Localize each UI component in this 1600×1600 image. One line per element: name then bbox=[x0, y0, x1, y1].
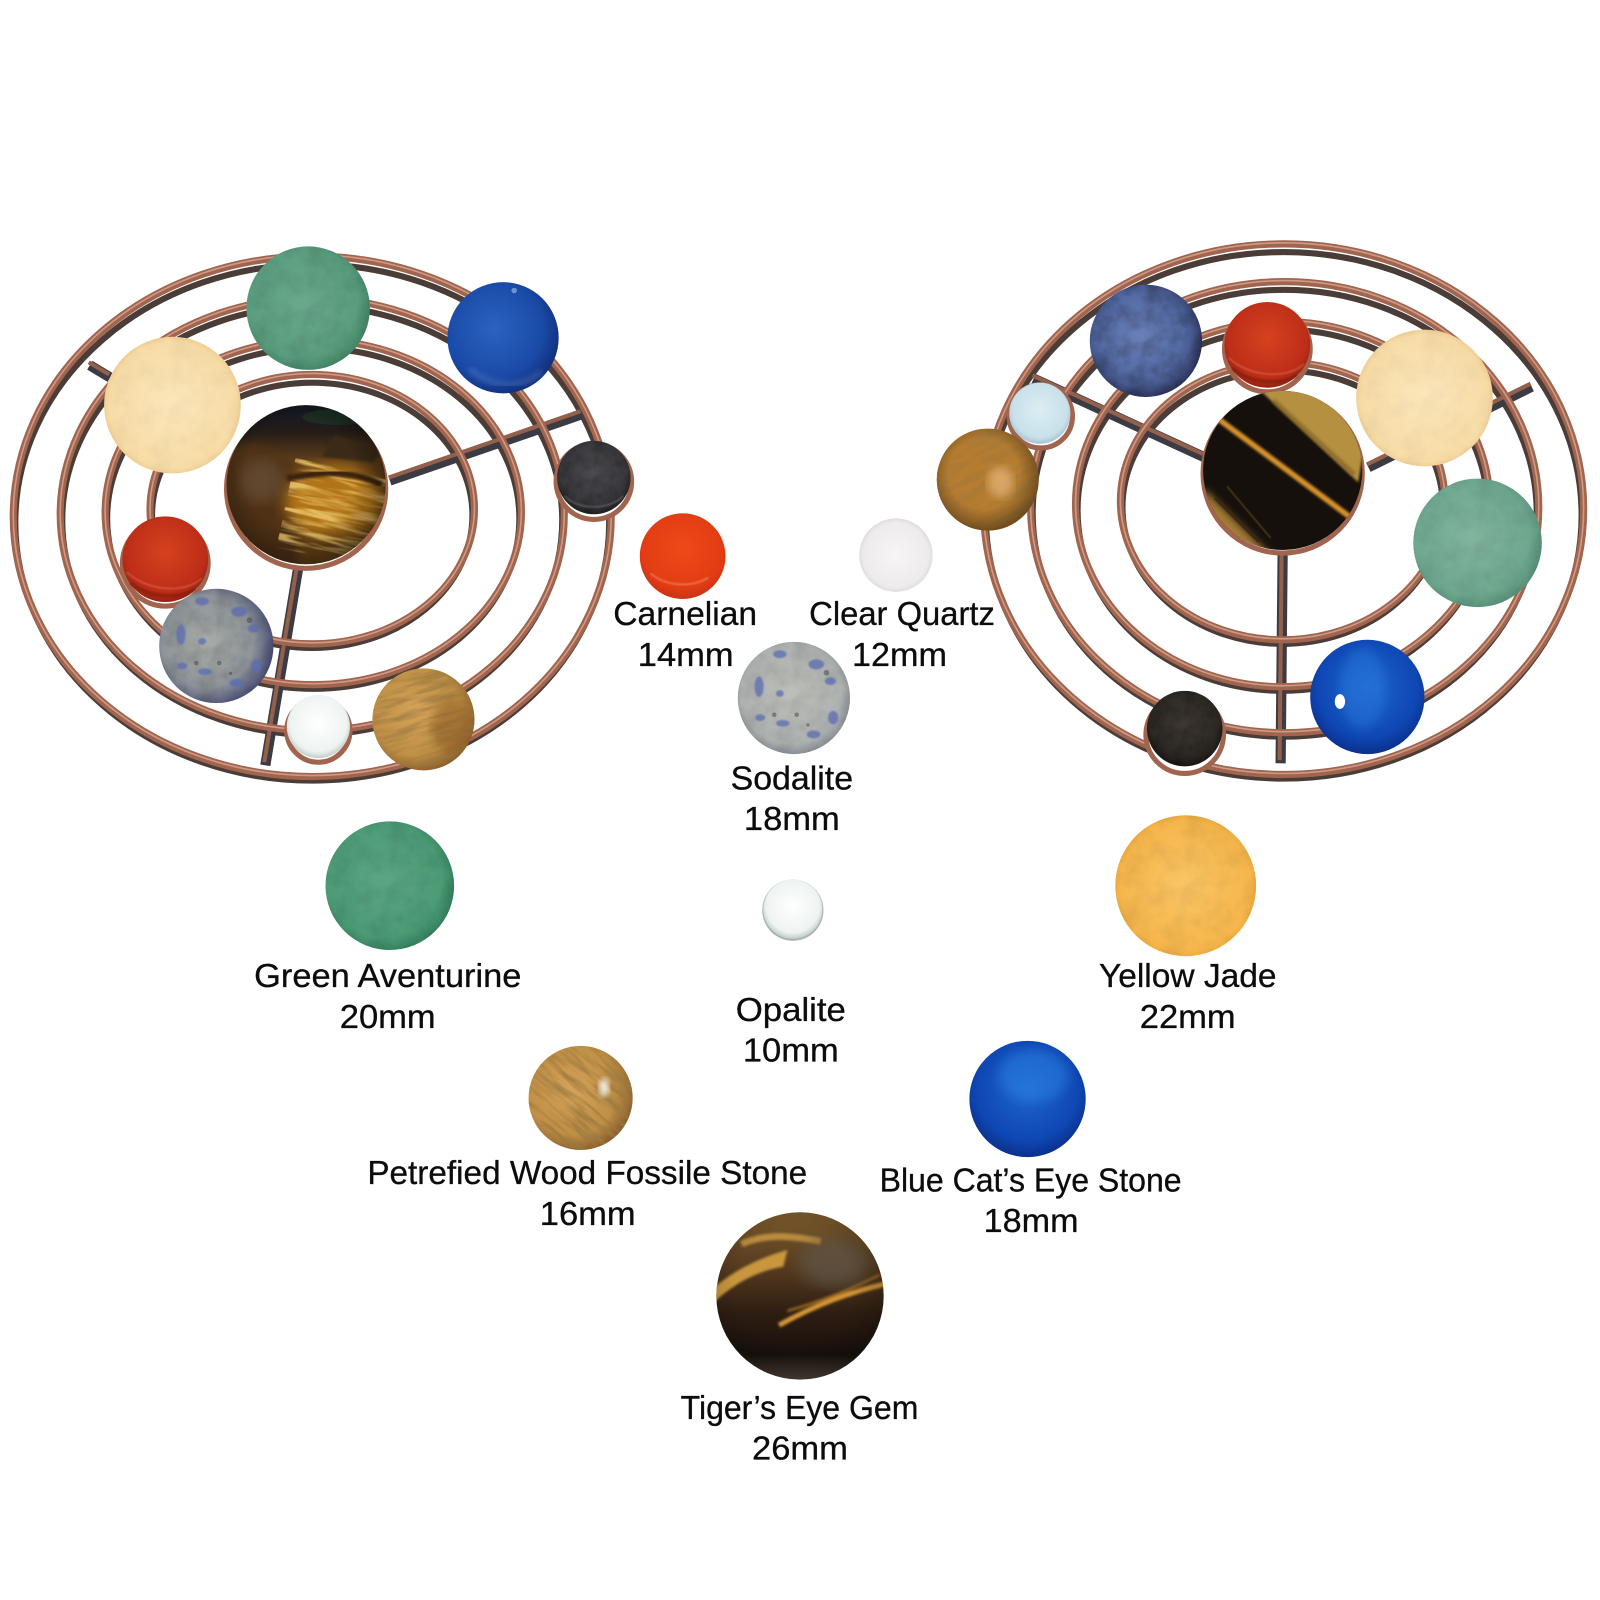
icon: blue cat's eye sphere bbox=[969, 1041, 1086, 1157]
stone: opalite bbox=[287, 695, 350, 758]
stone: petrified wood bbox=[342, 638, 505, 801]
label: green aventurine: Green Aventurine bbox=[254, 958, 521, 995]
stone: yellow jade with label bbox=[1099, 815, 1277, 1036]
icon: opalite sphere bbox=[762, 880, 823, 941]
stone: blue cat's eye with label bbox=[880, 1041, 1182, 1240]
label: carnelian: 14mm bbox=[638, 637, 734, 674]
label: carnelian: Carnelian bbox=[613, 596, 757, 633]
stone: green aventurine bbox=[246, 246, 370, 370]
label: blue cat's eye: Blue Cat’s Eye Stone bbox=[880, 1162, 1182, 1199]
stone: carnelian bbox=[122, 516, 208, 602]
stone: green aventurine bbox=[1413, 479, 1542, 607]
stone: smoky quartz bbox=[1147, 691, 1222, 766]
label: yellow jade: Yellow Jade bbox=[1099, 958, 1277, 995]
label: petrified wood bbox=[367, 1155, 807, 1233]
icon: clear quartz sphere bbox=[859, 518, 933, 592]
icon: tiger's eye sphere bbox=[712, 1212, 888, 1380]
stone: green aventurine with label bbox=[254, 821, 521, 1036]
stone: clear quartz smoky bbox=[557, 441, 631, 514]
label: blue cat's eye: 18mm bbox=[984, 1203, 1079, 1240]
label: carnelian bbox=[613, 596, 757, 674]
stone: yellow jade bbox=[104, 337, 241, 473]
right copper solar system with stones bbox=[900, 243, 1584, 779]
stone: clear quartz with label bbox=[809, 518, 995, 674]
stone: tiger's eye bbox=[1203, 383, 1374, 560]
label: green aventurine: 20mm bbox=[340, 999, 436, 1036]
icon: petrified wood sphere bbox=[485, 1003, 676, 1193]
label: petrified wood: Petrefied Wood Fossile Stone bbox=[367, 1155, 807, 1192]
holders bbox=[122, 409, 632, 762]
label: opalite: 10mm bbox=[743, 1033, 839, 1070]
right frame rings and spokes bbox=[984, 243, 1584, 779]
left copper solar system with stones bbox=[13, 246, 632, 801]
stone: blue cat's eye bbox=[447, 282, 559, 393]
stone: petrified wood bbox=[900, 391, 1076, 568]
label: sodalite bbox=[731, 760, 853, 838]
stone: tiger's eye bbox=[227, 405, 393, 568]
stone: carnelian with label bbox=[613, 513, 757, 674]
stone: yellow jade bbox=[1356, 330, 1493, 466]
icon: yellow jade sphere bbox=[1115, 815, 1256, 956]
label: opalite bbox=[736, 992, 846, 1070]
label: blue cat's eye bbox=[880, 1162, 1182, 1240]
label: opalite: Opalite bbox=[736, 992, 846, 1029]
label: clear quartz: Clear Quartz bbox=[809, 596, 995, 633]
label: yellow jade bbox=[1099, 958, 1277, 1036]
stone: opalite bbox=[1009, 383, 1070, 444]
label: green aventurine bbox=[254, 958, 521, 1036]
stone: petrified wood with label bbox=[367, 1003, 807, 1233]
label: sodalite: Sodalite bbox=[731, 760, 853, 797]
label: sodalite: 18mm bbox=[744, 801, 840, 838]
label: clear quartz bbox=[809, 596, 995, 674]
label: petrified wood: 16mm bbox=[540, 1196, 636, 1233]
icon: carnelian sphere bbox=[640, 513, 726, 599]
icon: green aventurine sphere bbox=[326, 821, 454, 950]
icon: sodalite sphere bbox=[738, 642, 850, 754]
stone: sodalite with label bbox=[731, 642, 853, 838]
stone: carnelian bbox=[1224, 302, 1310, 388]
stone: blue cat's eye bbox=[1310, 640, 1424, 754]
holders bbox=[1009, 306, 1362, 773]
stone: sodalite bbox=[159, 589, 273, 703]
left frame rings and spokes bbox=[13, 255, 611, 781]
stone: opalite with label bbox=[736, 880, 846, 1070]
label: clear quartz: 12mm bbox=[852, 637, 947, 674]
label: tiger's eye: Tiger’s Eye Gem bbox=[681, 1390, 918, 1427]
stone: sodalite bbox=[1090, 285, 1202, 397]
label: tiger's eye: 26mm bbox=[752, 1431, 848, 1468]
label: yellow jade: 22mm bbox=[1140, 999, 1236, 1036]
label: tiger's eye bbox=[681, 1390, 918, 1468]
stone: tiger's eye with label bbox=[681, 1212, 918, 1468]
